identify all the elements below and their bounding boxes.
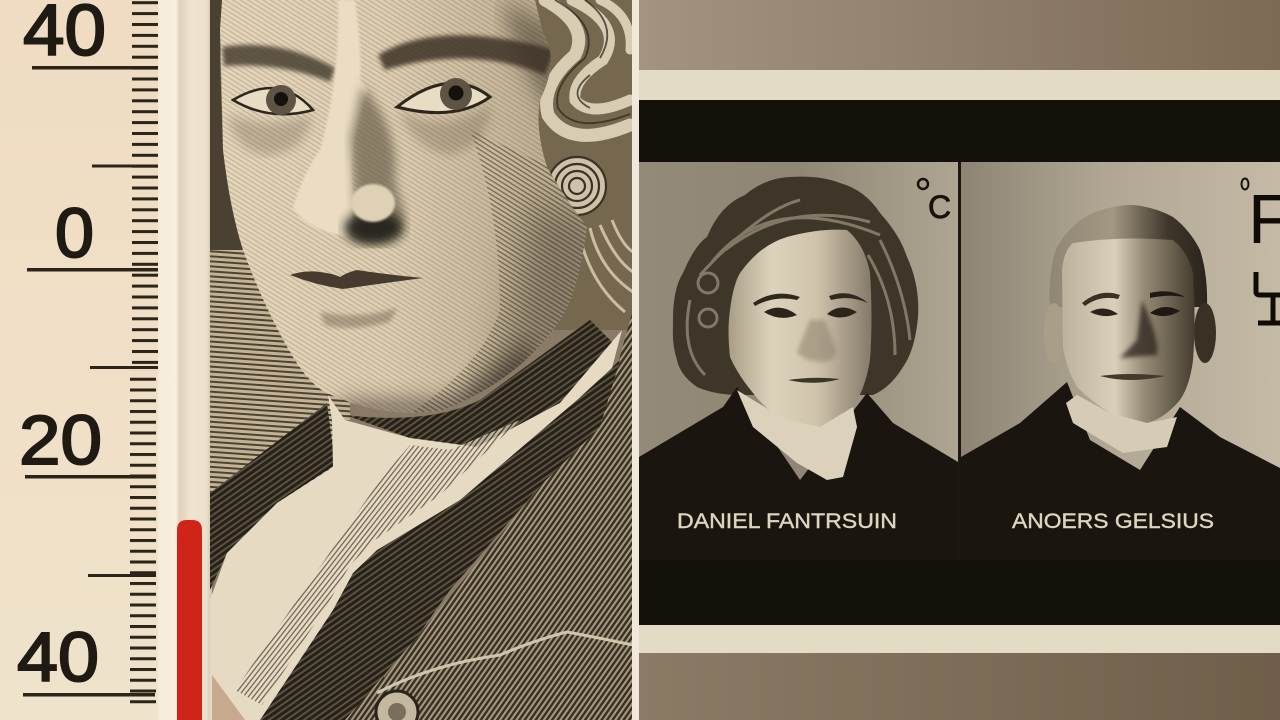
name label Daniel: DANIEL FANTRSUIN [677,510,897,533]
right brow [378,35,555,75]
scale label 40 bottom: 40 [17,618,99,696]
face [210,0,610,420]
hair [1050,205,1207,307]
face [728,230,872,427]
scale tick marks [23,0,158,708]
hair spiral curl [548,157,606,215]
panel divider [632,0,639,720]
degree F mark [1242,178,1280,323]
lower curls [580,220,633,312]
right eye socket [398,105,490,155]
lapel [260,360,620,720]
dark hair left [210,0,243,250]
left eye socket [228,115,312,155]
cravat shading [235,420,520,705]
cheek shading [414,130,587,412]
hair curls [520,0,633,330]
portrait: Anders [961,162,1280,560]
frame bottom [639,625,1280,653]
skin patch at corner [212,675,245,720]
degree C mark [918,179,951,225]
dark coat shoulder [210,403,335,590]
coat [639,387,958,560]
portrait: Daniel [639,162,958,560]
striped background [210,160,350,500]
ears [1044,303,1064,363]
matte dark [639,100,1280,625]
thermometer scale panel [0,0,160,720]
coat [961,382,1280,560]
pocket line [377,632,633,693]
scale label 0: 0 [55,194,94,272]
left eye [233,85,313,115]
face [1062,239,1194,423]
scale label 20: 20 [19,401,102,479]
thermometer tube [158,0,212,720]
right eye [397,78,490,113]
framed picture [639,70,1280,653]
coat [350,310,633,720]
name label Anders: ANOERS GELSIUS [1012,510,1214,533]
nostril shadow [344,211,404,245]
features [753,293,868,383]
collar [1066,395,1177,453]
degree C mark: C [928,189,951,225]
hair [673,177,918,395]
neck shadow [345,320,615,447]
coat button [376,691,418,720]
red mercury column [177,520,202,720]
wall top [639,0,1280,70]
nose ridge [293,0,368,237]
collar [737,390,857,480]
cravat [210,330,622,720]
engraved portrait panel [210,0,633,720]
features [1082,291,1185,380]
frame top [639,70,1280,100]
left brow [222,45,335,82]
mouth [290,270,423,328]
wall bottom [639,653,1280,720]
portrait divider [958,162,961,560]
